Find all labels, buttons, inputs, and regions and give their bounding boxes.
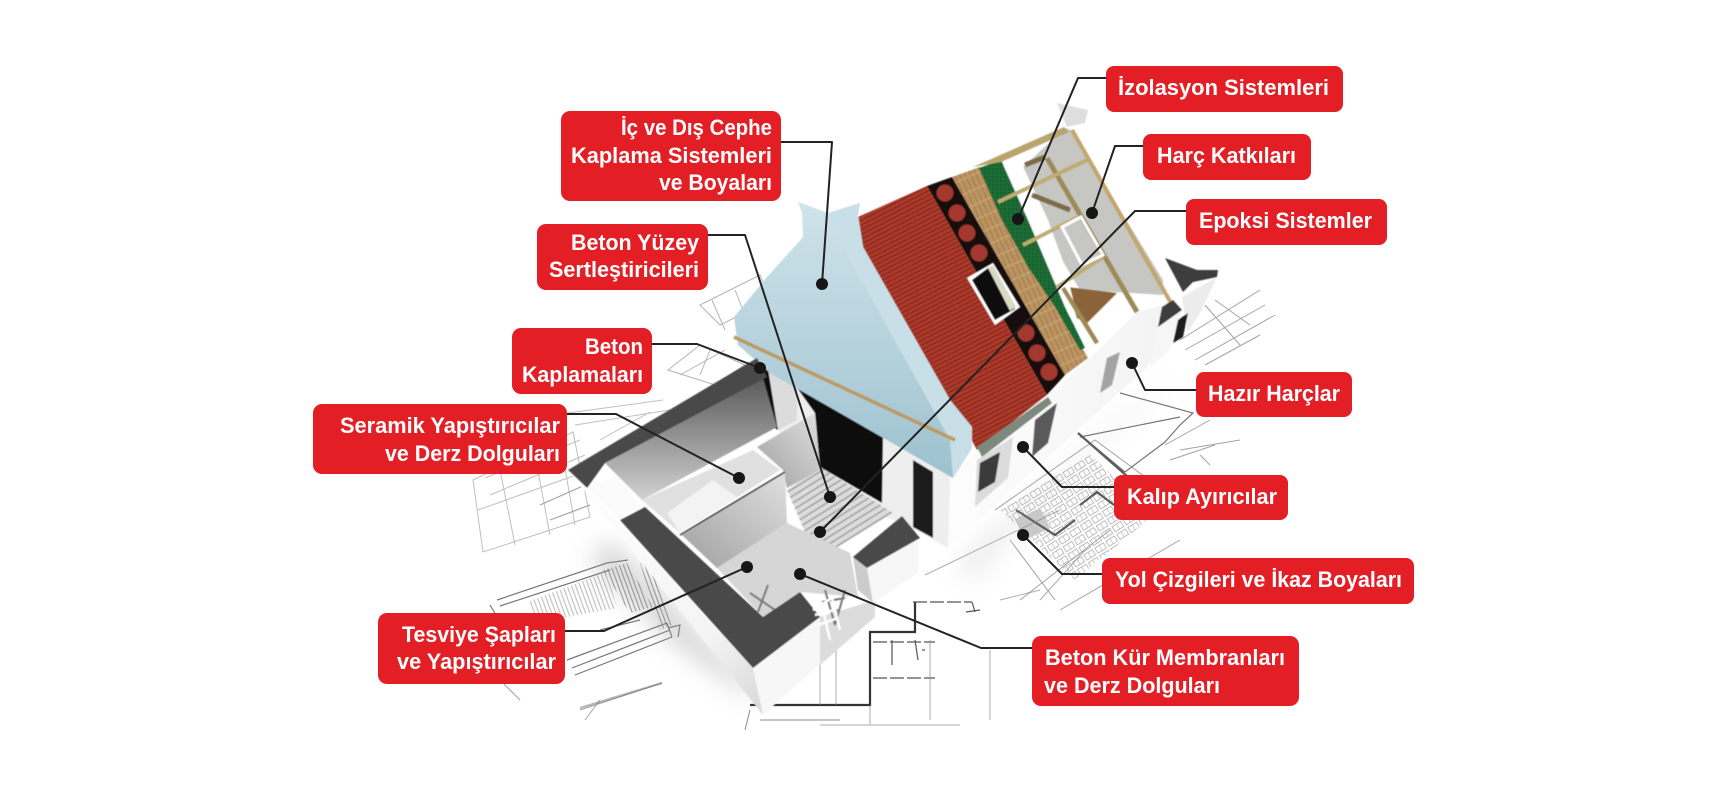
floor plan: white gap between walls (587, 475, 642, 520)
floor plan: partition (757, 413, 820, 488)
blueprint: left upper sheet (473, 400, 670, 552)
roof: timber rafters and ridge (973, 127, 1171, 343)
leader: İç ve Dış Cephe (781, 142, 832, 284)
house: side wall (948, 303, 1175, 548)
leader lines (564, 78, 1196, 648)
house: third window (1100, 352, 1120, 393)
leader: Kalıp Ayırıcılar (1023, 447, 1114, 487)
ground shadow (590, 380, 1170, 695)
label: Kalıp Ayırıcılar (1114, 475, 1288, 520)
label: Yol Çizgileri ve İkaz Boyaları: Yol Çizgileri ve İkaz Boyaları (1115, 567, 1402, 592)
floor plan: corner wall face (753, 617, 820, 715)
floor plan: scaffolding marks (750, 585, 845, 625)
house model (568, 103, 1218, 715)
label: Tesviye Şapları ve Yapıştırıcılar: ve Yapıştırıcılar (397, 649, 556, 674)
label: Hazır Harçlar: Hazır Harçlar (1208, 381, 1340, 406)
leader: Seramik (567, 414, 739, 478)
label: Beton Yüzey Sertleştiricileri: Sertleştiricileri (549, 257, 699, 282)
floor plan: ladder (813, 598, 840, 640)
label: Harç Katkıları (1143, 134, 1311, 180)
leader: Epoksi (820, 211, 1186, 532)
house: front wall (770, 360, 955, 548)
annex: outbuilding on the right (1150, 258, 1218, 367)
floor plan: white floor patch (667, 480, 737, 533)
roof: interior grey space (1022, 128, 1163, 295)
label: Beton Kür Membranları ve Derz Dolguları: Beton Kür Membranları (1045, 645, 1285, 670)
roof: black membrane band with vents (927, 177, 1065, 395)
label: Seramik Yapıştırıcılar ve Derz Dolguları: ve Derz Dolguları (385, 441, 560, 466)
label: İzolasyon Sistemleri (1106, 66, 1343, 112)
house: second window (1032, 403, 1057, 457)
leader: Harç Katkıları (1092, 146, 1143, 213)
label: Beton Yüzey Sertleştiricileri: Beton Yüzey (571, 230, 699, 255)
label: Harç Katkıları: Harç Katkıları (1157, 143, 1296, 168)
leader: İzolasyon (1018, 78, 1106, 219)
roof: white window frame (1062, 217, 1103, 265)
floor plan: inner wall edge (680, 472, 785, 535)
leader: Beton Yüzey (708, 235, 830, 497)
leader end dots (733, 207, 1138, 580)
label: Beton Kür Membranları ve Derz Dolguları (1032, 636, 1299, 706)
label: Yol Çizgileri ve İkaz Boyaları (1102, 558, 1414, 604)
label: İç ve Dış Cephe Kaplama Sistemleri ve Boyaları (561, 111, 781, 201)
blueprint: bottom sheet (745, 510, 1085, 730)
house: side window (975, 437, 1013, 507)
floor plan: front wall top (620, 507, 820, 668)
gable: wooden stripe (734, 337, 955, 440)
house: black interior behind gable (795, 385, 883, 503)
label: Hazır Harçlar (1196, 372, 1352, 417)
label: İç ve Dış Cephe Kaplama Sistemleri ve Boyaları: İç ve Dış Cephe (621, 115, 772, 140)
roof: wooden floor (1067, 287, 1117, 323)
leader: Beton Kür (800, 574, 1032, 648)
roof: gutter (977, 397, 1052, 457)
floor plan: white outer wall (568, 470, 763, 715)
floor plan: stair area (787, 467, 893, 560)
floor plan: back wall top (568, 358, 767, 488)
roof: green membrane (979, 160, 1085, 350)
floor plan: upper room floor (642, 450, 780, 533)
roof: wood boarding (952, 167, 1088, 375)
label: Kalıp Ayırıcılar: Kalıp Ayırıcılar (1127, 484, 1277, 509)
leader: Yol Çizgileri (1023, 535, 1102, 574)
chimney back (1057, 103, 1088, 127)
label: Beton Yüzey Sertleştiricileri (537, 224, 708, 290)
roof: skylight (967, 263, 1020, 325)
roof: white insulation strip (1003, 160, 1075, 318)
label: Seramik Yapıştırıcılar ve Derz Dolguları (313, 404, 567, 474)
label: Epoksi Sistemler: Epoksi Sistemler (1199, 208, 1372, 233)
gable: light blue wall (734, 202, 972, 478)
leader: Hazır Harçlar (1132, 363, 1196, 390)
blueprint: lower right sheet (995, 290, 1275, 610)
floor plan: ground slab to the right of the wall (820, 600, 875, 665)
floor plan: main room floor (717, 523, 858, 617)
roof: red tiles (858, 186, 1047, 450)
label: İzolasyon Sistemleri: İzolasyon Sistemleri (1118, 75, 1329, 100)
leader: Tesviye (564, 567, 747, 631)
blueprint: upper left sheet behind gable (668, 275, 770, 385)
floor plan: small block (853, 516, 920, 603)
label: Epoksi Sistemler (1186, 199, 1387, 245)
label: Seramik Yapıştırıcılar ve Derz Dolguları: Seramik Yapıştırıcılar (340, 413, 560, 438)
floor plan: inner wall (682, 472, 787, 568)
leader: Beton Kaplamaları (652, 344, 760, 368)
label: Beton Kaplamaları: Kaplamaları (522, 362, 643, 387)
house: front door (913, 460, 933, 538)
gable: lighter side band (828, 203, 972, 478)
floor plan: back wall inner face (605, 378, 777, 500)
label: İç ve Dış Cephe Kaplama Sistemleri ve Boyaları: ve Boyaları (659, 170, 772, 195)
label: Tesviye Şapları ve Yapıştırıcılar: Tesviye Şapları (402, 622, 556, 647)
label: Beton Kür Membranları ve Derz Dolguları: ve Derz Dolguları (1044, 673, 1220, 698)
house: dark column (757, 363, 778, 430)
blueprint: left lower sheet (490, 560, 680, 720)
label: Beton Kaplamaları: Beton (585, 334, 643, 359)
label: Tesviye Şapları ve Yapıştırıcılar (378, 613, 565, 684)
label: İç ve Dış Cephe Kaplama Sistemleri ve Boyaları: Kaplama Sistemleri (571, 143, 772, 168)
label: Beton Kaplamaları (512, 328, 652, 394)
house: column beside interior (767, 363, 797, 430)
blueprint drawings on the ground (473, 275, 1275, 730)
